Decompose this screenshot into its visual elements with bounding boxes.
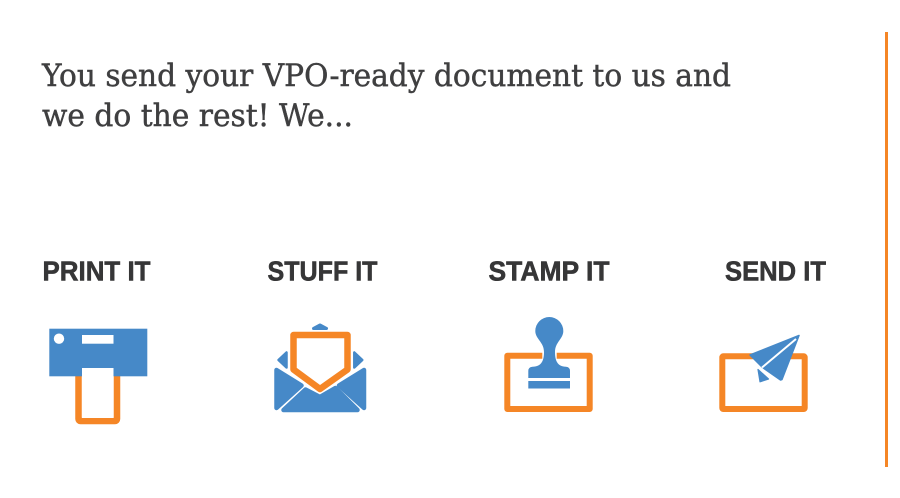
icon: envelope with letter	[276, 325, 364, 410]
label: stamp it: STAMP IT	[488, 256, 610, 286]
intro heading	[41, 58, 731, 134]
intro heading: we do the rest! We...	[42, 98, 353, 134]
label: stuff it: STUFF IT	[268, 256, 378, 286]
intro heading: You send your VPO-ready document to us and	[41, 58, 731, 94]
label: print it: PRINT IT	[42, 256, 150, 286]
label: send it: SEND IT	[725, 256, 826, 286]
right orange rule	[885, 32, 888, 467]
icon: paper plane	[722, 336, 805, 409]
icon: rubber stamp	[507, 317, 590, 409]
icon: printer	[49, 329, 147, 421]
